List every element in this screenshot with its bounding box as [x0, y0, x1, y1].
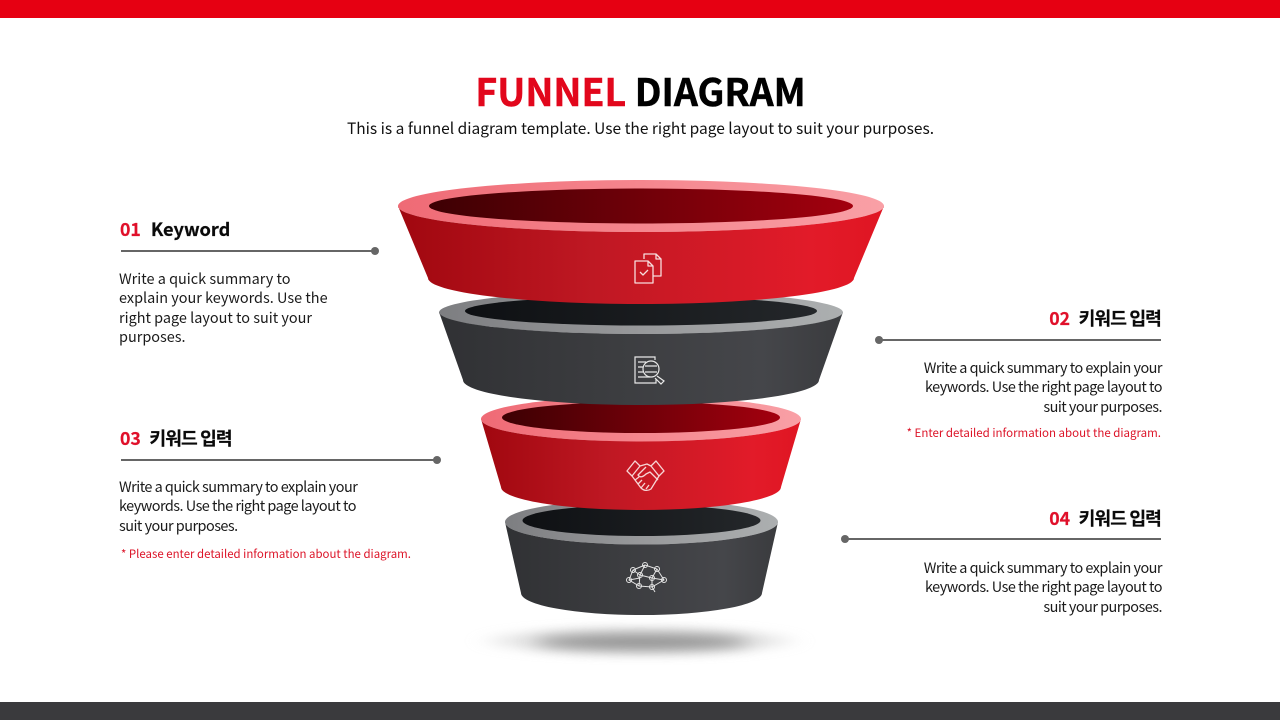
icon: documents with check	[635, 254, 661, 283]
leader line 03	[121, 458, 440, 460]
summary 01	[119, 268, 328, 347]
bottom bar	[0, 702, 1280, 720]
summary 04: suit your purposes.	[1043, 596, 1162, 616]
summary 01: Write a quick summary to	[119, 268, 290, 288]
summary 02: Write a quick summary to explain your	[924, 356, 1162, 378]
funnel tier 2	[439, 291, 843, 405]
summary 03: keywords. Use the right page layout to	[119, 495, 356, 516]
panel: keyword 03	[119, 425, 441, 562]
note 02: * Enter detailed information about the diagram.	[907, 424, 1161, 440]
panel: keyword 01	[119, 216, 379, 347]
funnel tier 4	[505, 500, 778, 615]
top bar	[0, 0, 1280, 18]
summary 02	[924, 356, 1162, 416]
summary 03	[119, 476, 358, 536]
panel: keyword 04	[841, 505, 1162, 616]
subtitle: This is a funnel diagram template. Use the right page layout to suit your purposes.	[347, 117, 934, 139]
summary 03: Write a quick summary to explain your	[119, 476, 357, 496]
summary 04	[924, 556, 1162, 616]
icon: document search	[635, 357, 664, 384]
summary 01: purposes.	[119, 326, 186, 347]
note 03: * Please enter detailed information about the diagram.	[121, 546, 411, 562]
shadow under funnel	[492, 628, 788, 654]
summary 04: keywords. Use the right page layout to	[925, 576, 1162, 597]
heading 02: 02 키워드 입력	[1049, 305, 1161, 331]
heading 01: 01 Keyword	[120, 216, 230, 242]
summary 02: keywords. Use the right page layout to	[925, 376, 1162, 397]
icon: network brain	[626, 562, 666, 592]
leader line 01	[121, 250, 378, 252]
summary 04: Write a quick summary to explain your	[924, 556, 1162, 578]
summary 03: suit your purposes.	[119, 514, 238, 536]
summary 02: suit your purposes.	[1043, 396, 1162, 416]
funnel tier 3	[481, 396, 801, 510]
leader line 02	[877, 339, 1161, 341]
heading 04: 04 키워드 입력	[1049, 505, 1161, 531]
icon: handshake	[627, 461, 664, 490]
funnel tier 1	[398, 180, 884, 304]
heading 03: 03 키워드 입력	[120, 425, 232, 451]
title: FUNNEL DIAGRAM	[475, 62, 806, 117]
summary 01: explain your keywords. Use the	[119, 287, 328, 308]
leader line 04	[843, 538, 1161, 540]
summary 01: right page layout to suit your	[119, 306, 312, 328]
panel: keyword 02	[875, 305, 1162, 440]
